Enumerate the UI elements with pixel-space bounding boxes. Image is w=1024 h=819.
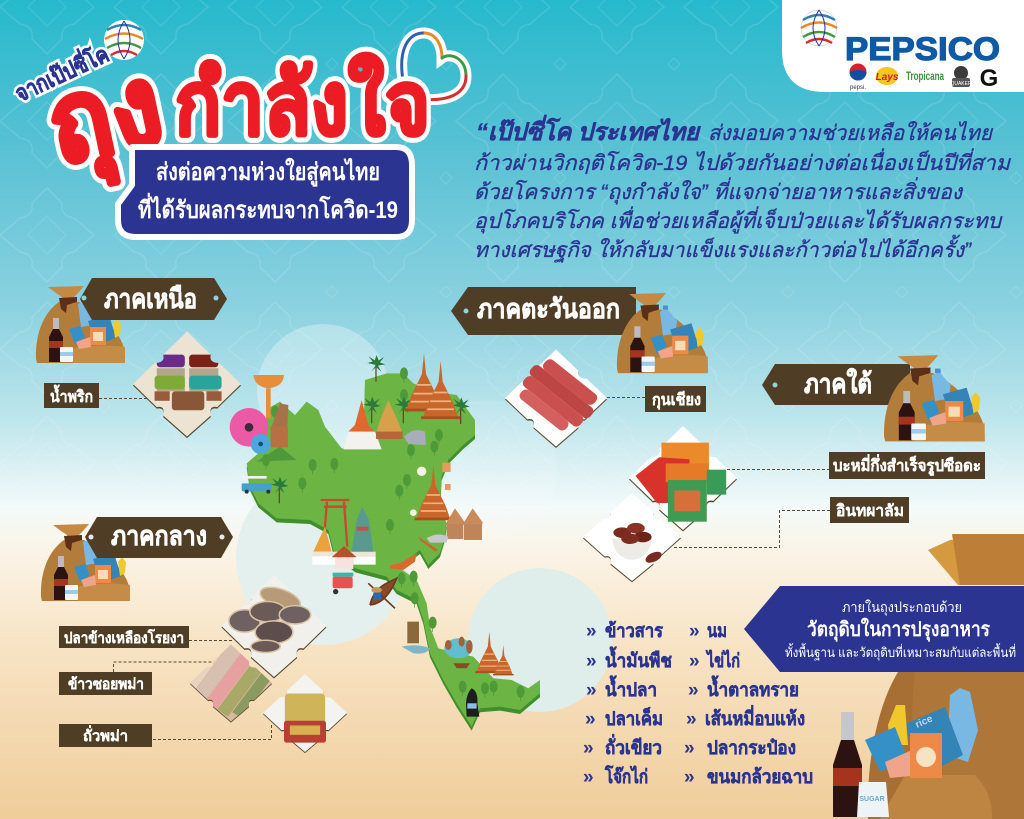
food tile: instant noodles <box>629 426 737 532</box>
ingredient list: » <box>583 738 594 759</box>
label: khao soi: ข้าวซอยพม่า <box>68 676 144 693</box>
ingredient list: น้ำปลา <box>605 675 657 701</box>
bag icon <box>617 293 708 373</box>
small heading: from PepsiCo: จากเป๊ปซี่โค <box>9 37 113 107</box>
quote text block: อุปโภคบริโภค เพื่อช่วยเหลือผู้ที่เจ็บป่วยและได้รับผลกระทบ <box>474 206 1003 234</box>
pale background circles <box>236 324 612 712</box>
title: กำลังใจ: กำลังใจ <box>175 53 430 153</box>
title: ถุง: ถุง <box>37 42 174 195</box>
subtitle pill <box>118 147 412 237</box>
panel: central region <box>41 517 347 753</box>
map trees <box>262 367 525 701</box>
bag icon <box>884 355 985 441</box>
landmarks: south <box>402 622 514 717</box>
food tile: Chinese sausage <box>505 350 607 448</box>
ingredient list: » <box>586 651 597 672</box>
icon: heart outline <box>402 33 466 100</box>
ingredient list: ขนมกล้วยฉาบ <box>707 766 813 788</box>
ingredient list: ปลาเค็ม <box>605 706 663 730</box>
label: dates: อินทผาลัม <box>836 502 904 520</box>
quote text block: “เป๊ปซี่โค ประเทศไทย <box>476 114 701 146</box>
ingredient list: » <box>688 680 699 701</box>
panel: south region <box>583 355 985 582</box>
ingredient list: นม <box>707 621 727 642</box>
large bag illustration <box>833 534 1024 819</box>
ingredient list: น้ำตาลทราย <box>707 675 799 701</box>
panel: PepsiCo logo <box>782 0 1024 92</box>
ingredient list: » <box>586 680 597 701</box>
label: fish: ปลาข้างเหลืองโรยงา <box>64 628 184 647</box>
label: Chinese sausage <box>645 386 706 412</box>
icon: globe <box>104 20 144 60</box>
label: beans <box>59 724 152 747</box>
landmarks: north <box>230 353 470 454</box>
quote text block: ส่งมอบความช่วยเหลือให้คนไทย <box>708 121 994 145</box>
landmarks: giant swing and Bangkok temple <box>312 500 397 608</box>
heading: north: ภาคเหนือ <box>104 284 197 314</box>
ingredient list: โจ๊กไก่ <box>604 765 648 788</box>
banner line 1: ภายในถุงประกอบด้วย <box>842 599 962 616</box>
ingredient list: ถั่วเขียว <box>605 734 662 759</box>
heading: south: ภาคใต้ <box>804 368 872 399</box>
ingredient list: ปลากระป๋อง <box>707 738 796 759</box>
subtitle line 2: ที่ได้รับผลกระทบจากโควิด-19 <box>138 192 398 224</box>
quote text block: ก้าวผ่านวิกฤติโควิด-19 ไปด้วยกันอย่างต่อเนื่องเป็นปีที่สาม <box>474 148 1011 175</box>
heading: east <box>451 287 636 335</box>
banner: bag contents <box>744 586 1024 672</box>
banner line 2: วัตถุดิบในการปรุงอาหาร <box>807 617 990 642</box>
ingredient list: » <box>684 738 695 759</box>
ingredient list: ข้าวสาร <box>605 620 664 642</box>
brand icons <box>850 64 998 92</box>
label: instant noodles: บะหมี่กึ่งสำเร็จรูปซือดะ <box>833 454 981 477</box>
brand icons: G <box>980 65 998 92</box>
PepsiCo wordmark: PEPSICO <box>845 31 1000 67</box>
ingredient list: น้ำมันพืช <box>605 646 672 672</box>
title: กำลังใจ: กำลังใจ <box>175 53 430 153</box>
ingredient list <box>583 620 813 788</box>
label: beans: ถั่วพม่า <box>83 725 128 745</box>
label: instant noodles <box>829 452 985 479</box>
brand icons: pepsi. <box>850 85 866 91</box>
ingredient list: ไข่ไก่ <box>705 649 740 672</box>
label: chilli paste: น้ำพริก <box>50 384 93 406</box>
subtitle line 1: ส่งต่อความห่วงใยสู่คนไทย <box>156 157 380 187</box>
ingredient list: » <box>583 767 594 788</box>
brand icons: Tropicana <box>906 69 944 83</box>
heading: east: ภาคตะวันออก <box>477 294 620 324</box>
label: dates <box>830 497 909 523</box>
map landmass <box>247 373 540 731</box>
bag icon <box>41 524 130 601</box>
icon: PepsiCo globe <box>801 10 837 46</box>
title lockup <box>9 20 466 237</box>
food tile: khao soi <box>190 644 272 722</box>
heading: central <box>85 517 233 558</box>
food tile: Burmese beans <box>263 674 347 753</box>
heading: north <box>80 278 227 320</box>
heading: south <box>762 364 910 405</box>
landmarks: east <box>390 463 483 570</box>
label: Chinese sausage: กุนเชียง <box>652 390 701 410</box>
brand icons: Lays <box>876 72 899 83</box>
map of Thailand <box>230 353 540 731</box>
ingredient list: » <box>684 767 695 788</box>
ingredient list: » <box>586 621 597 642</box>
label: chilli paste <box>44 383 99 408</box>
ingredient list: เส้นหมี่อบแห้ง <box>705 705 805 730</box>
landmarks: tuk tuk and palm <box>242 476 289 503</box>
bag icon <box>36 286 125 363</box>
small heading: from PepsiCo: จากเป๊ปซี่โค <box>9 37 113 107</box>
ingredient list: » <box>689 651 700 672</box>
panel: north region <box>36 278 241 438</box>
quote text block: ด้วยโครงการ “ถุงกำลังใจ” ที่แจกจ่ายอาหารและสิ่งของ <box>474 177 964 205</box>
heading: central: ภาคกลาง <box>111 521 207 551</box>
ingredient list: » <box>686 709 697 730</box>
quote text block <box>474 114 1011 263</box>
food tile: fried fish <box>222 575 326 679</box>
title: ถุง: ถุง <box>37 42 174 195</box>
brand icons: QUAKER <box>950 81 972 87</box>
label: khao soi <box>59 672 152 695</box>
large bag illustration: SUGAR <box>859 796 885 803</box>
food tile: chilli paste jars <box>133 332 241 438</box>
quote text block: ทางเศรษฐกิจ ให้กลับมาแข็งแรงและก้าวต่อไปได้อีกครั้ง” <box>474 234 972 263</box>
panel: east region <box>451 287 708 448</box>
food tile: dates <box>583 493 681 582</box>
ingredient list: » <box>585 709 596 730</box>
large bag illustration: rice <box>914 713 935 731</box>
ingredient list: » <box>689 621 700 642</box>
